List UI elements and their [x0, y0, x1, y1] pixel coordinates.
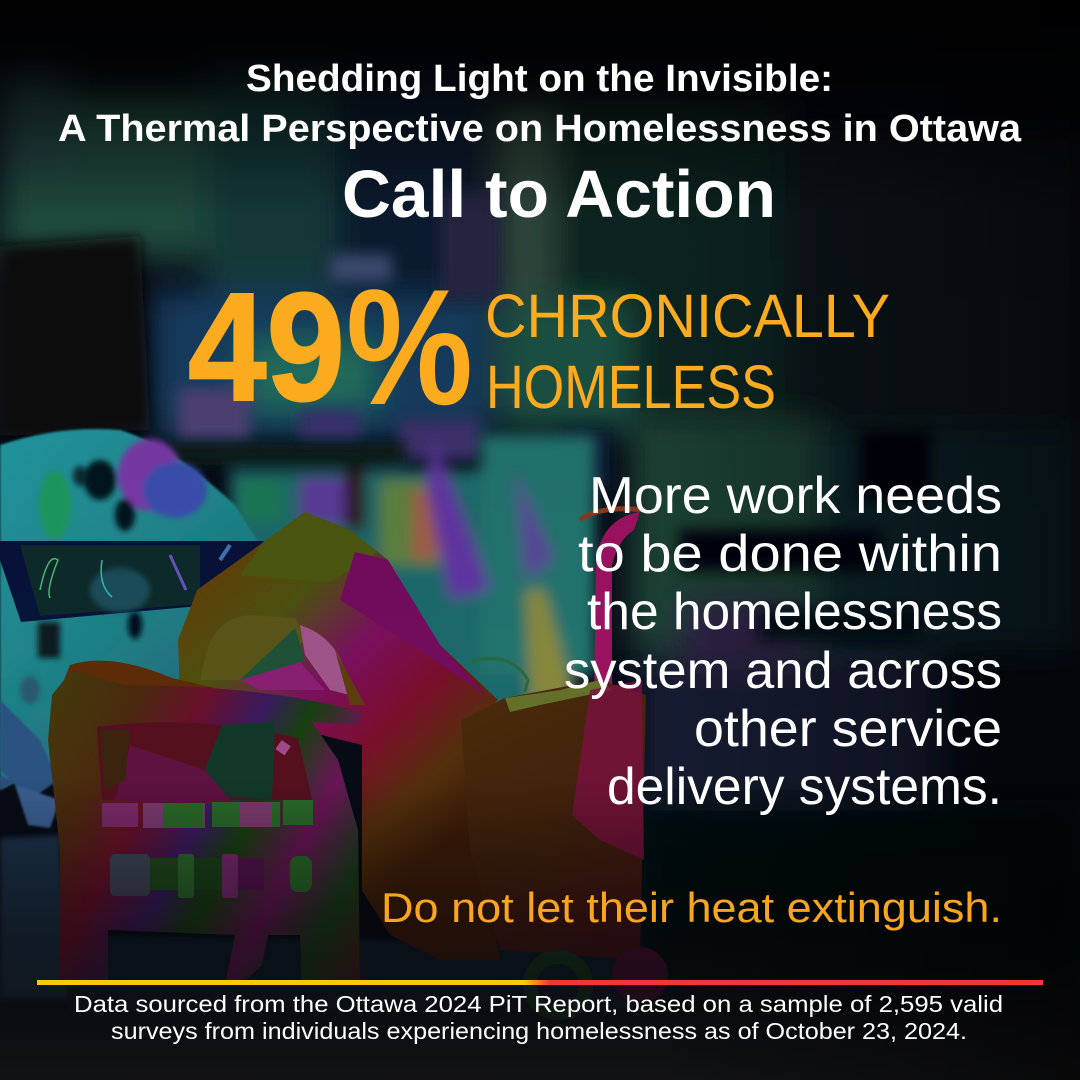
source note: surveys from individuals experiencing homelessness as of October 23, 2024. [111, 1018, 967, 1044]
source note [74, 991, 1003, 1044]
seat contents [97, 722, 312, 800]
ground [0, 835, 70, 1000]
statistic: 49% chronically homeless [188, 255, 890, 439]
body text: more work needs to be done: other service [694, 700, 1002, 758]
body text: more work needs to be done [564, 467, 1002, 816]
statistic label: CHRONICALLY [485, 282, 890, 350]
divider rule: yellow to red [37, 980, 1043, 985]
blurred window shapes [178, 190, 930, 640]
body text: more work needs to be done: More work needs [589, 467, 1002, 525]
body text: more work needs to be done: system and across [564, 642, 1002, 700]
bench slat with graffiti [0, 541, 264, 622]
hair and head [200, 615, 308, 680]
bench back [0, 429, 260, 790]
dark block, upper left [0, 236, 150, 436]
heading: report title [58, 58, 1022, 150]
person under coat [60, 512, 500, 960]
heading: report title: A Thermal Perspective on Homelessness in Ottawa [58, 108, 1022, 150]
body text: more work needs to be done: the homelessness [587, 583, 1002, 641]
heading: report title: Shedding Light on the Invisible: [246, 58, 833, 100]
teal area behind the person [170, 435, 595, 720]
lower seat slats [110, 854, 150, 896]
percent sign: % [346, 255, 473, 439]
leaves [0, 700, 60, 828]
body text: more work needs to be done: to be done within [578, 525, 1002, 583]
callout: do not let their heat extinguish: Do not let their heat extinguish. [381, 884, 1002, 931]
body text: more work needs to be done: delivery systems. [607, 758, 1002, 816]
bag and trolley [461, 509, 668, 1013]
seat planks [102, 803, 138, 827]
heading: call to action: Call to Action [342, 157, 776, 232]
statistic label: HOMELESS [486, 353, 776, 421]
bench frame [48, 670, 362, 985]
bench paint marks [20, 439, 207, 704]
statistic number: 49 [188, 261, 345, 433]
statistic label [485, 282, 890, 421]
source note: Data sourced from the Ottawa 2024 PiT Report, based on a sample of 2,595 valid [74, 991, 1003, 1017]
